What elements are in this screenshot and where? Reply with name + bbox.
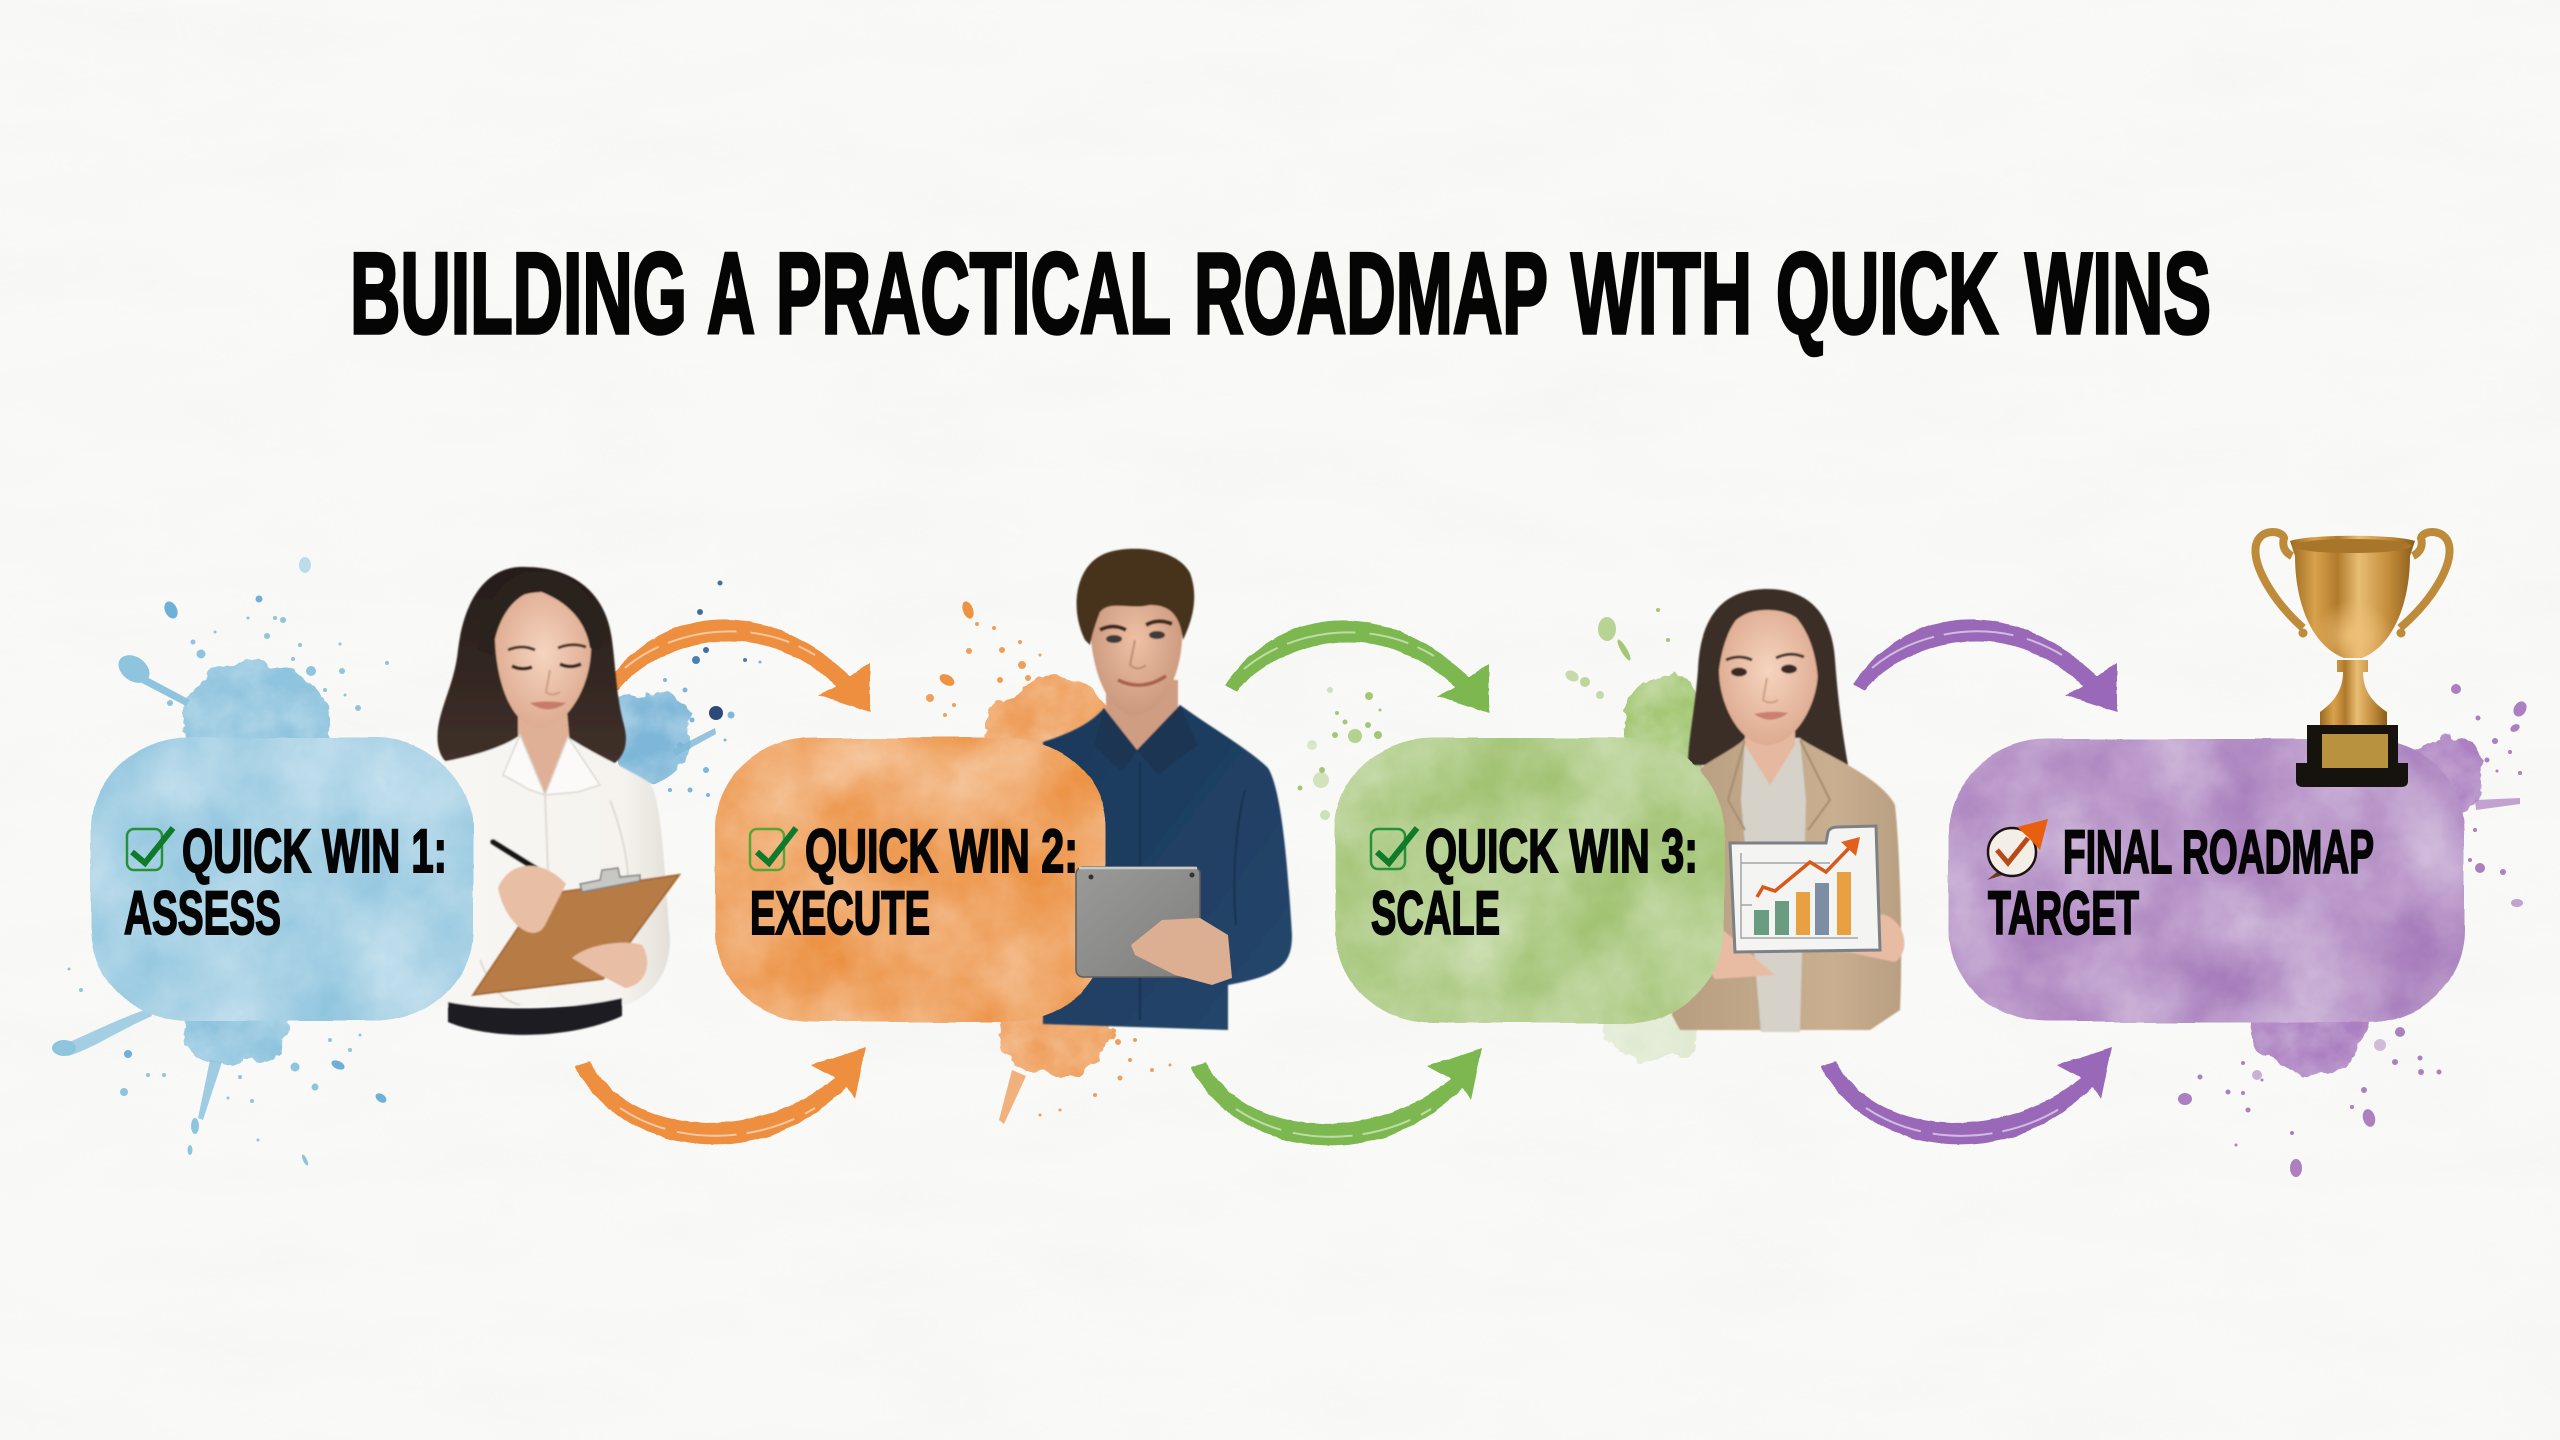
splatter: orange — [926, 600, 1172, 1124]
title: ROADMAP — [1194, 230, 1548, 358]
box shape — [1949, 739, 2464, 1022]
arrow: orange bottom — [575, 1047, 866, 1145]
check icon — [127, 828, 173, 870]
trend arrow — [1757, 837, 1860, 897]
bars — [1754, 872, 1851, 935]
title — [350, 230, 2211, 358]
blazer — [1672, 738, 1901, 1030]
check icon — [750, 828, 796, 870]
label: FINAL ROADMAP — [2063, 818, 2374, 886]
splatter: blue right of first person — [606, 580, 762, 797]
face — [495, 592, 591, 728]
trophy — [2255, 532, 2450, 787]
arrow: green bottom — [1191, 1048, 1482, 1146]
hair — [1688, 589, 1848, 765]
box 4: final roadmap target — [1949, 739, 2464, 1022]
box 2: quick win 2 — [715, 738, 1106, 1022]
shirt — [1741, 738, 1806, 1032]
label: QUICK WIN 1: — [182, 817, 447, 885]
skirt — [448, 998, 622, 1035]
splatter: green — [1298, 608, 1711, 1064]
label — [750, 817, 1078, 947]
hand on tablet — [1131, 918, 1232, 985]
title: BUILDING — [350, 230, 687, 358]
chart card — [1730, 826, 1880, 952]
shirt — [1043, 705, 1292, 1030]
label: TARGET — [1988, 879, 2139, 947]
label: QUICK WIN 2: — [805, 817, 1078, 885]
plate — [2322, 734, 2388, 768]
facial features — [508, 645, 586, 710]
arrow: purple bottom — [1821, 1047, 2112, 1145]
facial features — [1100, 621, 1172, 685]
lapels — [1728, 740, 1830, 830]
neck — [1106, 680, 1178, 750]
neck — [518, 700, 570, 795]
lower hands — [1706, 914, 1904, 979]
label — [1371, 817, 1698, 947]
hair back — [437, 567, 626, 772]
writing hand — [498, 866, 566, 933]
chart axes — [1741, 853, 1858, 938]
title: A — [707, 230, 755, 358]
title: PRACTICAL — [776, 230, 1171, 358]
tablet — [1076, 867, 1232, 985]
holding hand — [572, 943, 647, 988]
clipboard clip — [580, 868, 640, 892]
cup — [2290, 536, 2415, 658]
face — [1090, 580, 1182, 715]
facial features — [1726, 654, 1804, 720]
label — [124, 817, 447, 947]
plinth — [2296, 725, 2408, 787]
label: ASSESS — [124, 879, 281, 947]
box 1: quick win 1 — [91, 738, 473, 1021]
person 1: woman with clipboard — [432, 567, 679, 1035]
label: EXECUTE — [750, 879, 930, 947]
neck — [1745, 710, 1795, 785]
handles — [2255, 532, 2450, 628]
pen — [493, 842, 562, 885]
title: WINS — [2025, 230, 2211, 358]
clipboard — [473, 875, 679, 995]
hair — [1077, 549, 1194, 645]
title: QUICK — [1776, 230, 1998, 358]
stem — [2320, 660, 2387, 725]
person 3: woman with chart — [1672, 589, 1904, 1032]
title: WITH — [1571, 230, 1752, 358]
label — [1988, 818, 2374, 947]
arrow: purple top — [1853, 619, 2117, 712]
blouse — [432, 735, 670, 1007]
hair front — [478, 571, 601, 655]
check icon — [1371, 828, 1417, 869]
arrow: orange top — [606, 619, 870, 712]
box 3: quick win 3 — [1335, 738, 1724, 1023]
box shape — [715, 738, 1106, 1022]
face — [1719, 610, 1818, 745]
box shape — [91, 738, 473, 1021]
person 2: man with tablet — [1043, 549, 1292, 1030]
splatter: blue left — [52, 557, 389, 1166]
splatter: purple — [2178, 684, 2529, 1177]
hair front — [1705, 592, 1830, 680]
arrow: green top — [1225, 620, 1489, 713]
label: SCALE — [1371, 879, 1500, 947]
target icon — [1987, 819, 2048, 880]
label: QUICK WIN 3: — [1425, 817, 1698, 885]
box shape — [1335, 738, 1724, 1023]
